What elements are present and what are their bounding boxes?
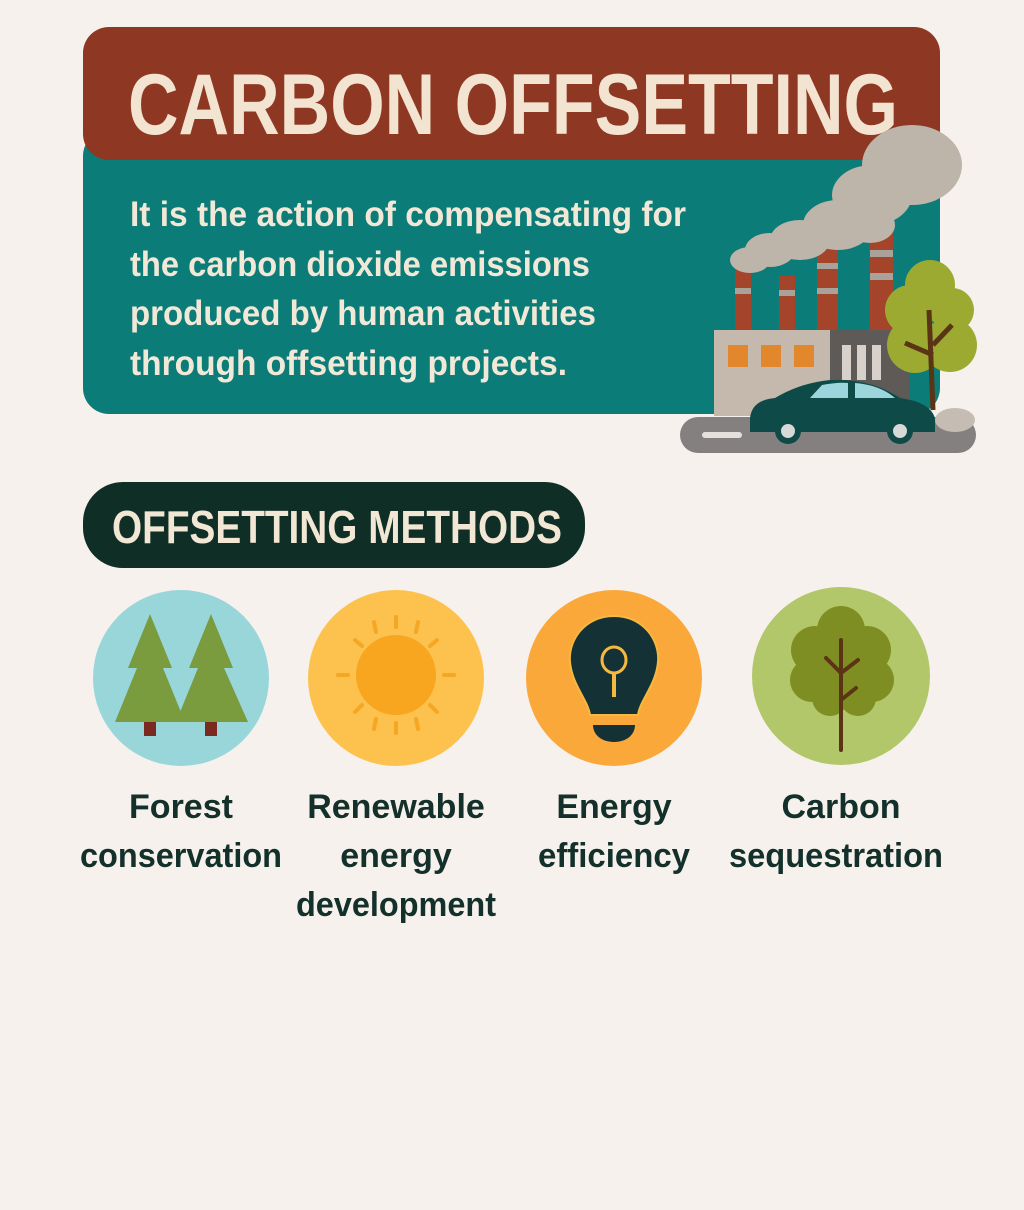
method: forest conservation: Forest bbox=[129, 788, 233, 826]
text block: definition: It is the action of compensating for bbox=[130, 195, 686, 234]
icon: tree bbox=[752, 587, 930, 765]
method: forest conservation: conservation bbox=[80, 837, 282, 875]
method: energy efficiency bbox=[526, 590, 702, 875]
method: renewable energy: Renewable bbox=[307, 788, 485, 826]
method: renewable energy: energy bbox=[340, 837, 452, 875]
buildings bbox=[714, 330, 830, 416]
smoke bbox=[730, 125, 962, 273]
heading: offsetting methods bbox=[83, 482, 585, 568]
chimneys bbox=[735, 270, 751, 332]
illustration: factory, car, tree bbox=[680, 125, 977, 453]
method: carbon sequestration: Carbon bbox=[782, 788, 900, 826]
method: energy efficiency: Energy bbox=[556, 788, 672, 826]
method: carbon sequestration: sequestration bbox=[729, 837, 943, 875]
text block: definition: produced by human activities bbox=[130, 294, 596, 333]
method: carbon sequestration bbox=[729, 587, 943, 875]
title banner bbox=[83, 27, 940, 160]
heading: offsetting methods: OFFSETTING METHODS bbox=[112, 501, 562, 553]
method: renewable energy bbox=[296, 590, 496, 924]
icon: pine trees bbox=[93, 590, 269, 766]
method: renewable energy: development bbox=[296, 886, 496, 924]
text block: definition: the carbon dioxide emissions bbox=[130, 245, 590, 284]
method: forest conservation bbox=[80, 590, 282, 875]
text block: definition: through offsetting projects. bbox=[130, 344, 567, 383]
car bbox=[750, 380, 935, 432]
icon: light bulb bbox=[526, 590, 702, 766]
icon: sun bbox=[308, 590, 484, 766]
panel: definition bbox=[83, 130, 940, 414]
road bbox=[680, 417, 976, 453]
tree bbox=[885, 260, 977, 373]
text block: definition bbox=[130, 195, 686, 383]
method: energy efficiency: efficiency bbox=[538, 837, 690, 875]
